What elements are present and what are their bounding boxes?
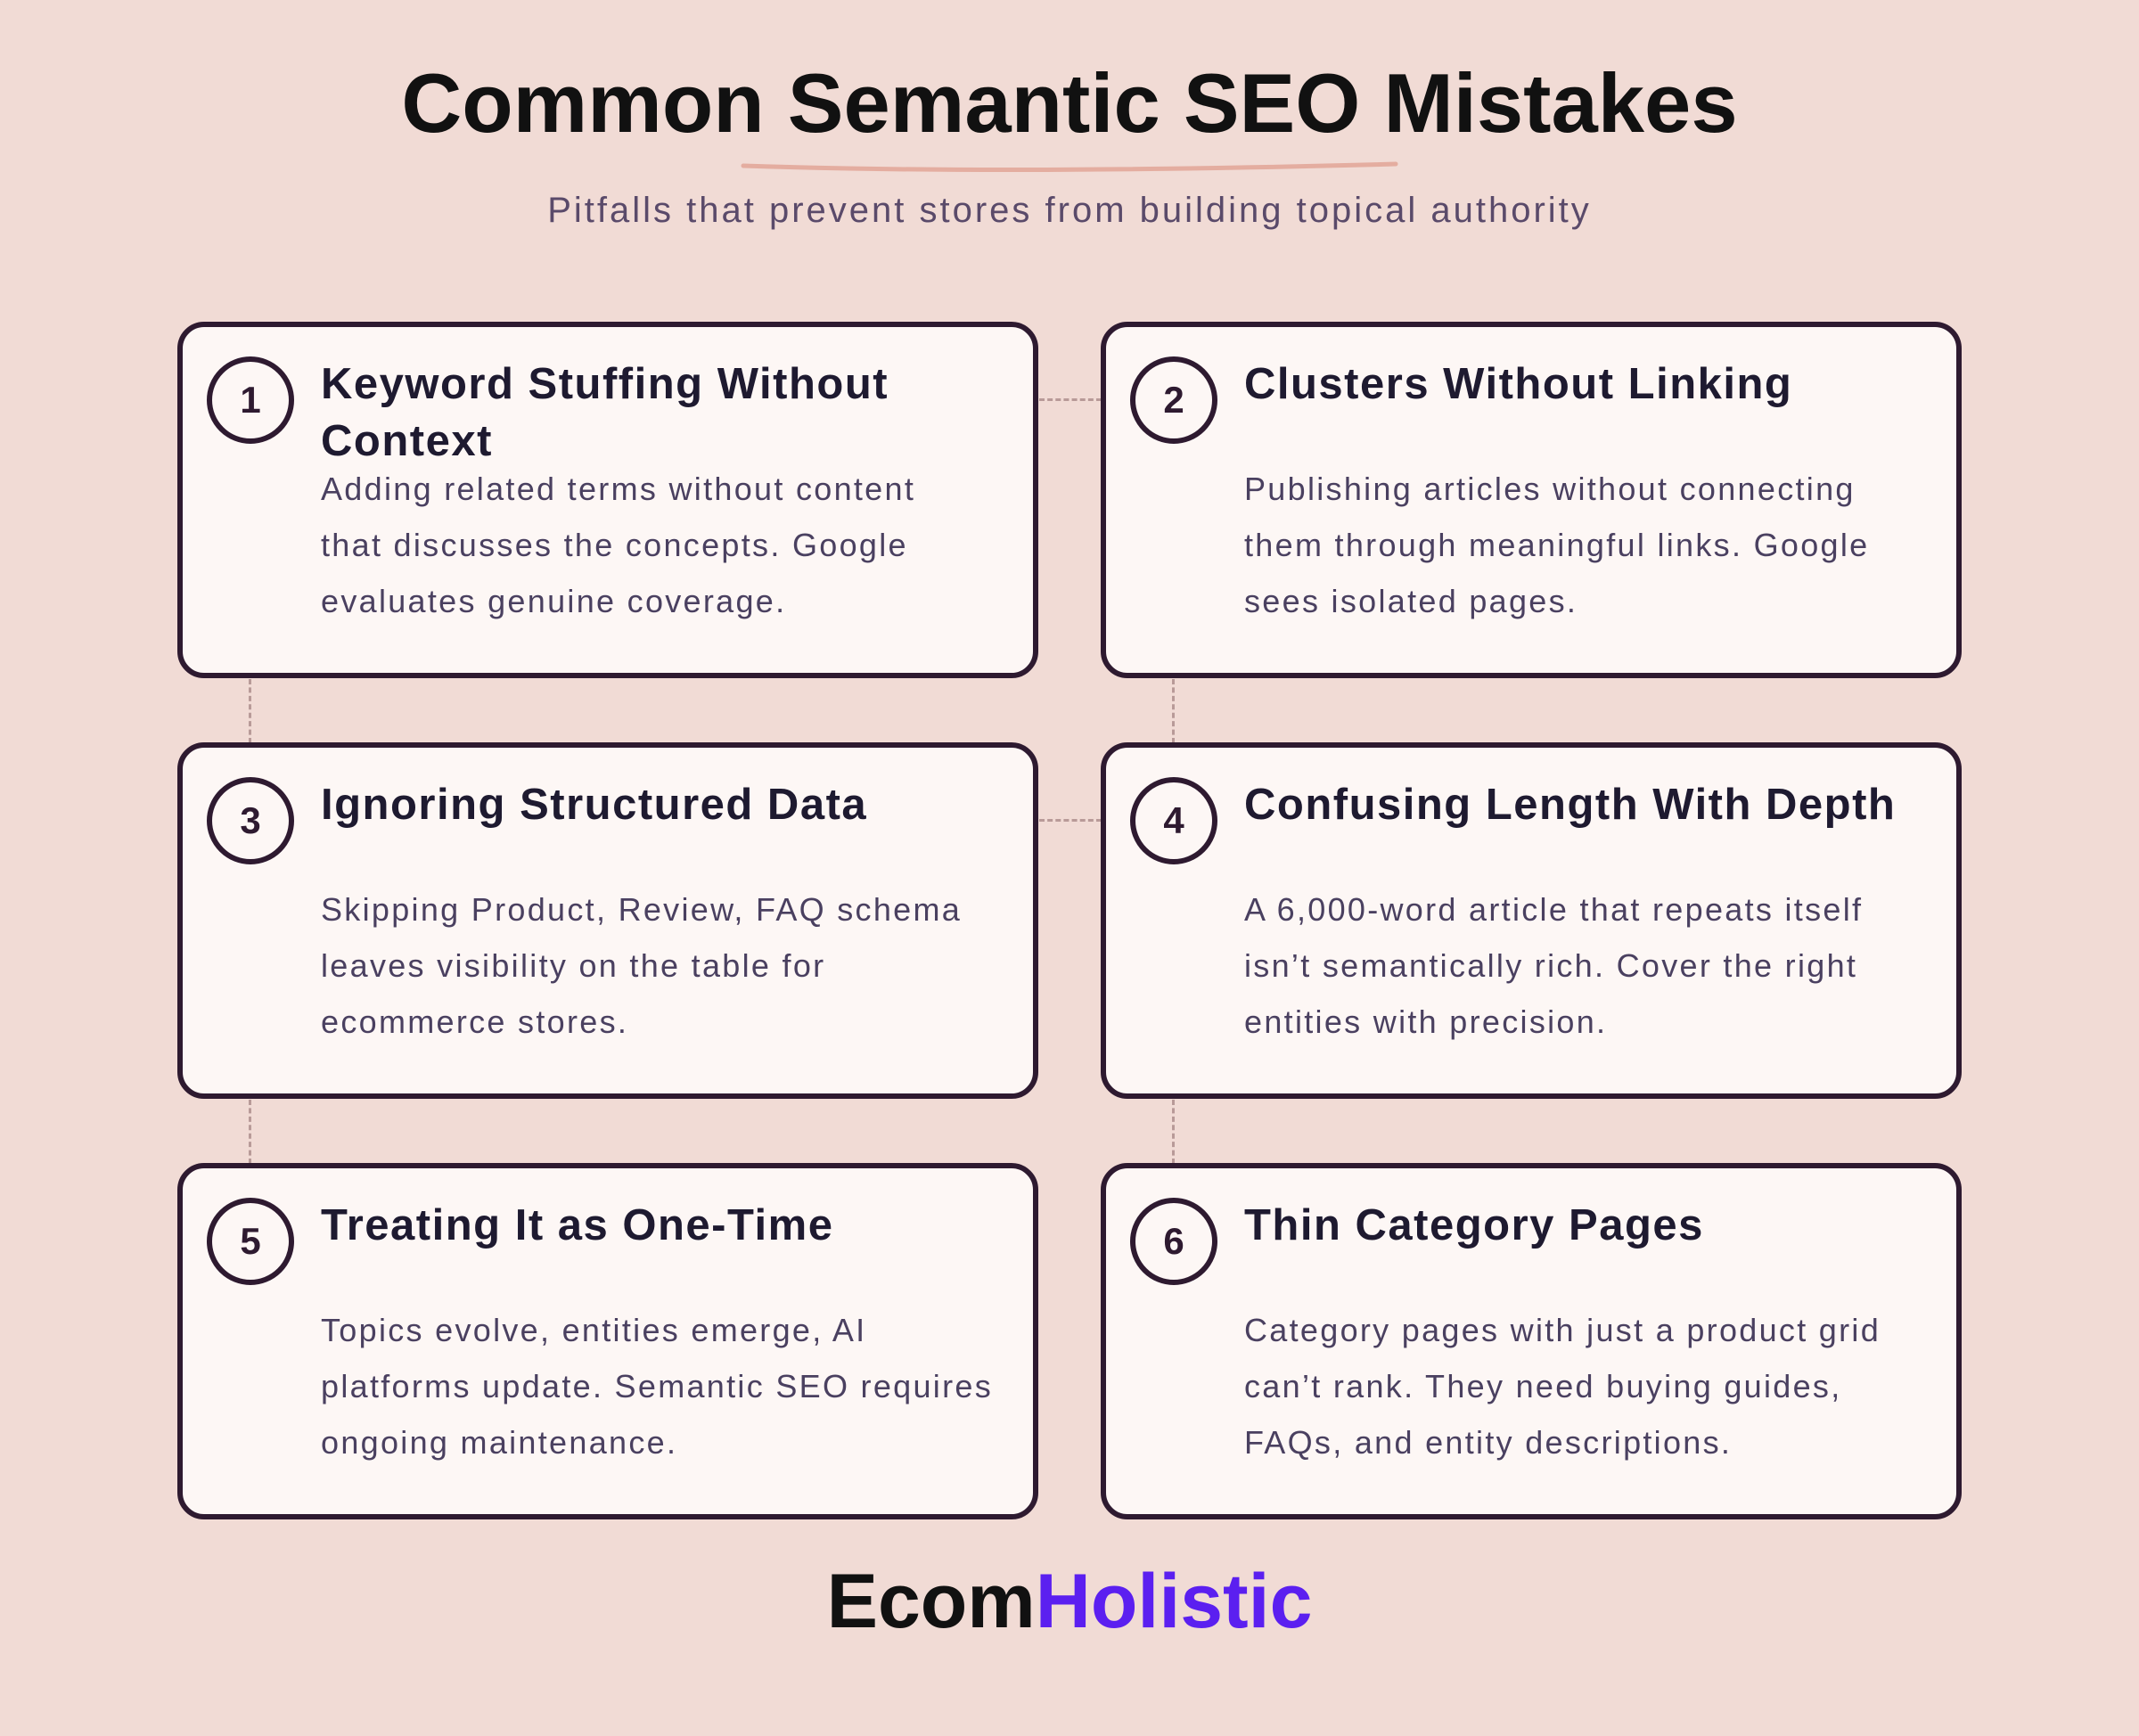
card 2: Publishing articles without connecting	[1244, 471, 1856, 507]
card 4: A 6,000-word article that repeats itself	[1244, 891, 1863, 928]
card 1: Adding related terms without content	[321, 471, 915, 507]
subtitle: Pitfalls that prevent stores from building topical authority	[547, 191, 1592, 230]
card 5: Treating It as One-Time	[321, 1201, 833, 1249]
card 3: leaves visibility on the table for	[321, 947, 825, 984]
card 5: ongoing maintenance.	[321, 1424, 677, 1461]
card 3: ecommerce stores.	[321, 1003, 628, 1040]
card 1: Keyword Stuffing Without	[321, 360, 889, 408]
card 2: sees isolated pages.	[1244, 583, 1578, 619]
card 4	[1101, 742, 1962, 1099]
card 1	[177, 322, 1038, 678]
card 5: 5	[240, 1220, 261, 1262]
card 1: Context	[321, 417, 493, 465]
card 6: can’t rank. They need buying guides,	[1244, 1368, 1842, 1404]
card 1: that discusses the concepts. Google	[321, 527, 908, 563]
card 6: 6	[1163, 1220, 1184, 1262]
card 1: evaluates genuine coverage.	[321, 583, 786, 619]
card 6: Thin Category Pages	[1244, 1201, 1704, 1249]
card 3: Ignoring Structured Data	[321, 781, 867, 829]
card 6	[1101, 1163, 1962, 1519]
card 6: FAQs, and entity descriptions.	[1244, 1424, 1732, 1461]
card 5: Topics evolve, entities emerge, AI	[321, 1312, 866, 1348]
card 6: Category pages with just a product grid	[1244, 1312, 1881, 1348]
card 3: 3	[240, 799, 261, 841]
card 3: Skipping Product, Review, FAQ schema	[321, 891, 962, 928]
title underline	[742, 162, 1397, 172]
card 1: 1	[240, 379, 261, 421]
card 2: 2	[1163, 379, 1184, 421]
card 2	[1101, 322, 1962, 678]
card 4: 4	[1163, 799, 1184, 841]
card 4: entities with precision.	[1244, 1003, 1607, 1040]
card 5: platforms update. Semantic SEO requires	[321, 1368, 993, 1404]
logo: EcomHolistic	[827, 1559, 1312, 1644]
card 5	[177, 1163, 1038, 1519]
card 2: them through meaningful links. Google	[1244, 527, 1869, 563]
card 2: Clusters Without Linking	[1244, 360, 1792, 408]
card 3	[177, 742, 1038, 1099]
card 4: Confusing Length With Depth	[1244, 781, 1896, 829]
card 4: isn’t semantically rich. Cover the right	[1244, 947, 1857, 984]
title: Common Semantic SEO Mistakes	[401, 56, 1738, 150]
